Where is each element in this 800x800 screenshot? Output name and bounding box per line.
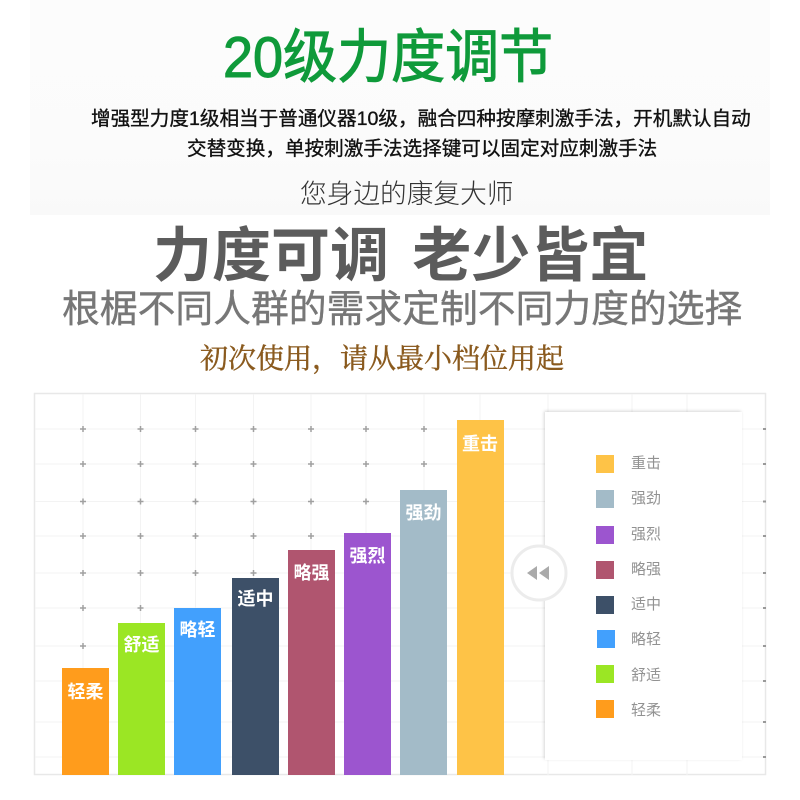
legend panel: 舒适 — [631, 667, 661, 684]
bar: 舒适 — [118, 623, 165, 775]
legend: 略轻 — [597, 630, 615, 648]
collapse button icon — [510, 544, 568, 602]
subheading: 根椐不同人群的需求定制不同力度的选择 — [62, 289, 742, 331]
legend panel: 轻柔 — [631, 702, 661, 719]
usage note: 初次使用，请从最小档位用起 — [200, 344, 564, 375]
bar: 强烈 — [344, 533, 391, 775]
legend: 略强 — [596, 561, 614, 579]
bar: 舒适: 舒适 — [124, 635, 160, 655]
bar: 略轻 — [174, 608, 221, 775]
legend: 强劲 — [596, 490, 614, 508]
heading: 力度可调 老少皆宜 — [153, 223, 648, 289]
bar: 略轻: 略轻 — [180, 620, 216, 640]
description text — [91, 108, 751, 160]
bar: 适中 — [232, 578, 279, 775]
bar: 轻柔 — [62, 668, 109, 775]
bar: 略强 — [288, 550, 335, 775]
bar: 适中: 适中 — [238, 589, 274, 609]
bar: 强劲 — [400, 490, 447, 775]
bar: 轻柔: 轻柔 — [68, 682, 104, 702]
tagline: 您身边的康复大师 — [300, 179, 514, 209]
legend panel: 适中 — [631, 596, 661, 613]
description text: 交替变换，单按刺激手法选择键可以固定对应刺激手法 — [187, 138, 657, 160]
legend panel: 略强 — [631, 561, 661, 578]
title: 20级力度调节 — [223, 26, 553, 90]
legend panel: 强烈 — [631, 526, 661, 543]
legend: 舒适 — [596, 665, 614, 683]
bar chart — [62, 420, 504, 775]
legend panel: 略轻 — [631, 631, 661, 648]
bar: 重击: 重击 — [462, 434, 498, 454]
bar: 强烈: 强烈 — [350, 546, 386, 566]
legend panel: 重击 — [631, 455, 661, 472]
legend: 适中 — [596, 596, 614, 614]
legend: 重击 — [596, 455, 614, 473]
bar: 略强: 略强 — [294, 563, 330, 583]
legend panel: 强劲 — [631, 490, 661, 507]
description text: 增强型力度1级相当于普通仪器10级，融合四种按摩刺激手法，开机默认自动 — [91, 108, 751, 130]
legend: 强烈 — [596, 526, 614, 544]
legend: 轻柔 — [596, 700, 614, 718]
bar: 强劲: 强劲 — [406, 503, 442, 523]
bar: 重击 — [456, 420, 504, 775]
